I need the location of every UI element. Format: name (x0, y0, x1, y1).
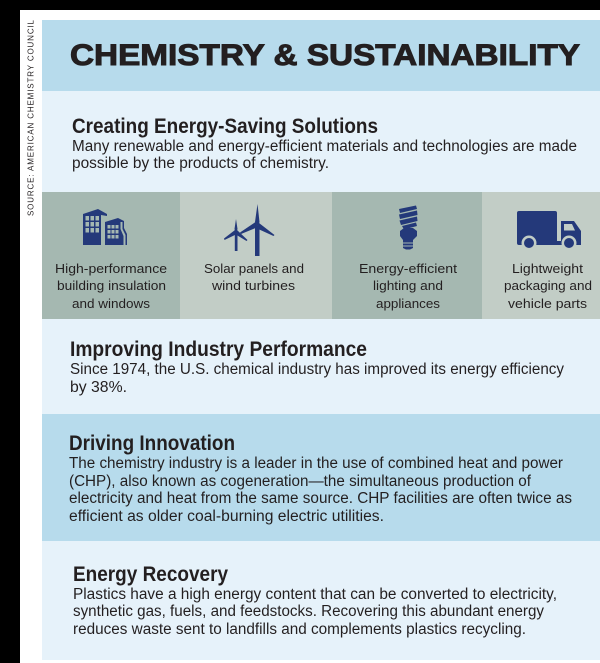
panel: creating energy-saving solutions: Many renewable and energy-efficient materials and technologies are made (72, 138, 577, 155)
panel: insulation and windows: building insulation (57, 278, 166, 293)
panel: energy recovery: reduces waste sent to landfills and complements plastics recycling. (73, 621, 526, 638)
panel: energy recovery (42, 541, 600, 660)
title banner: CHEMISTRY & SUSTAINABILITY (70, 39, 580, 72)
panel: creating energy-saving solutions: Creating Energy-Saving Solutions (72, 115, 378, 138)
icon: light bulb (399, 206, 418, 250)
panel: insulation and windows (42, 192, 180, 319)
panel: energy recovery: synthetic gas, fuels, and feedstocks. Recovering this abundant energy (73, 603, 544, 620)
panel: driving innovation: electricity and heat from the same source. CHP facilities are often twice as (69, 490, 572, 507)
panel: solar and wind: wind turbines (211, 278, 296, 293)
icon: truck (517, 211, 581, 250)
panel: driving innovation: efficient as older coal-burning electric utilities. (69, 508, 384, 525)
panel: efficient lighting: Energy-efficient (359, 261, 457, 276)
panel: creating energy-saving solutions: possible by the products of chemistry. (72, 155, 329, 172)
panel: energy recovery: Plastics have a high energy content that can be converted to electricity, (73, 586, 557, 603)
title banner (42, 20, 600, 91)
icon: buildings (83, 209, 127, 245)
panel: improving industry performance: Improving Industry Performance (70, 338, 367, 361)
panel: solar and wind: Solar panels and (204, 261, 304, 276)
panel: lightweight packaging: Lightweight (512, 261, 583, 276)
panel: driving innovation (42, 414, 600, 541)
panel: lightweight packaging: vehicle parts (508, 296, 588, 311)
icon: wind turbines (224, 204, 274, 256)
panel: improving industry performance (42, 319, 600, 414)
panel: efficient lighting: lighting and (373, 278, 443, 293)
panel: driving innovation: The chemistry industry is a leader in the use of combined heat and power (69, 455, 563, 472)
panel: improving industry performance: Since 1974, the U.S. chemical industry has improved its energy efficiency (70, 361, 564, 378)
panel: efficient lighting (332, 192, 482, 319)
source credit: SOURCE: AMERICAN CHEMISTRY COUNCIL (26, 19, 36, 216)
panel: lightweight packaging (482, 192, 600, 319)
panel: insulation and windows: High-performance (55, 261, 167, 276)
panel: creating energy-saving solutions (42, 91, 600, 192)
panel: driving innovation: Driving Innovation (69, 432, 235, 455)
panel: energy recovery: Energy Recovery (73, 563, 228, 586)
panel: insulation and windows: and windows (72, 296, 151, 311)
panel: improving industry performance: by 38%. (70, 379, 127, 396)
panel: lightweight packaging: packaging and (504, 278, 592, 293)
panel: efficient lighting: appliances (376, 296, 441, 311)
panel: solar and wind (180, 192, 332, 319)
panel: driving innovation: (CHP), also known as cogeneration—the simultaneous production of (69, 473, 532, 490)
